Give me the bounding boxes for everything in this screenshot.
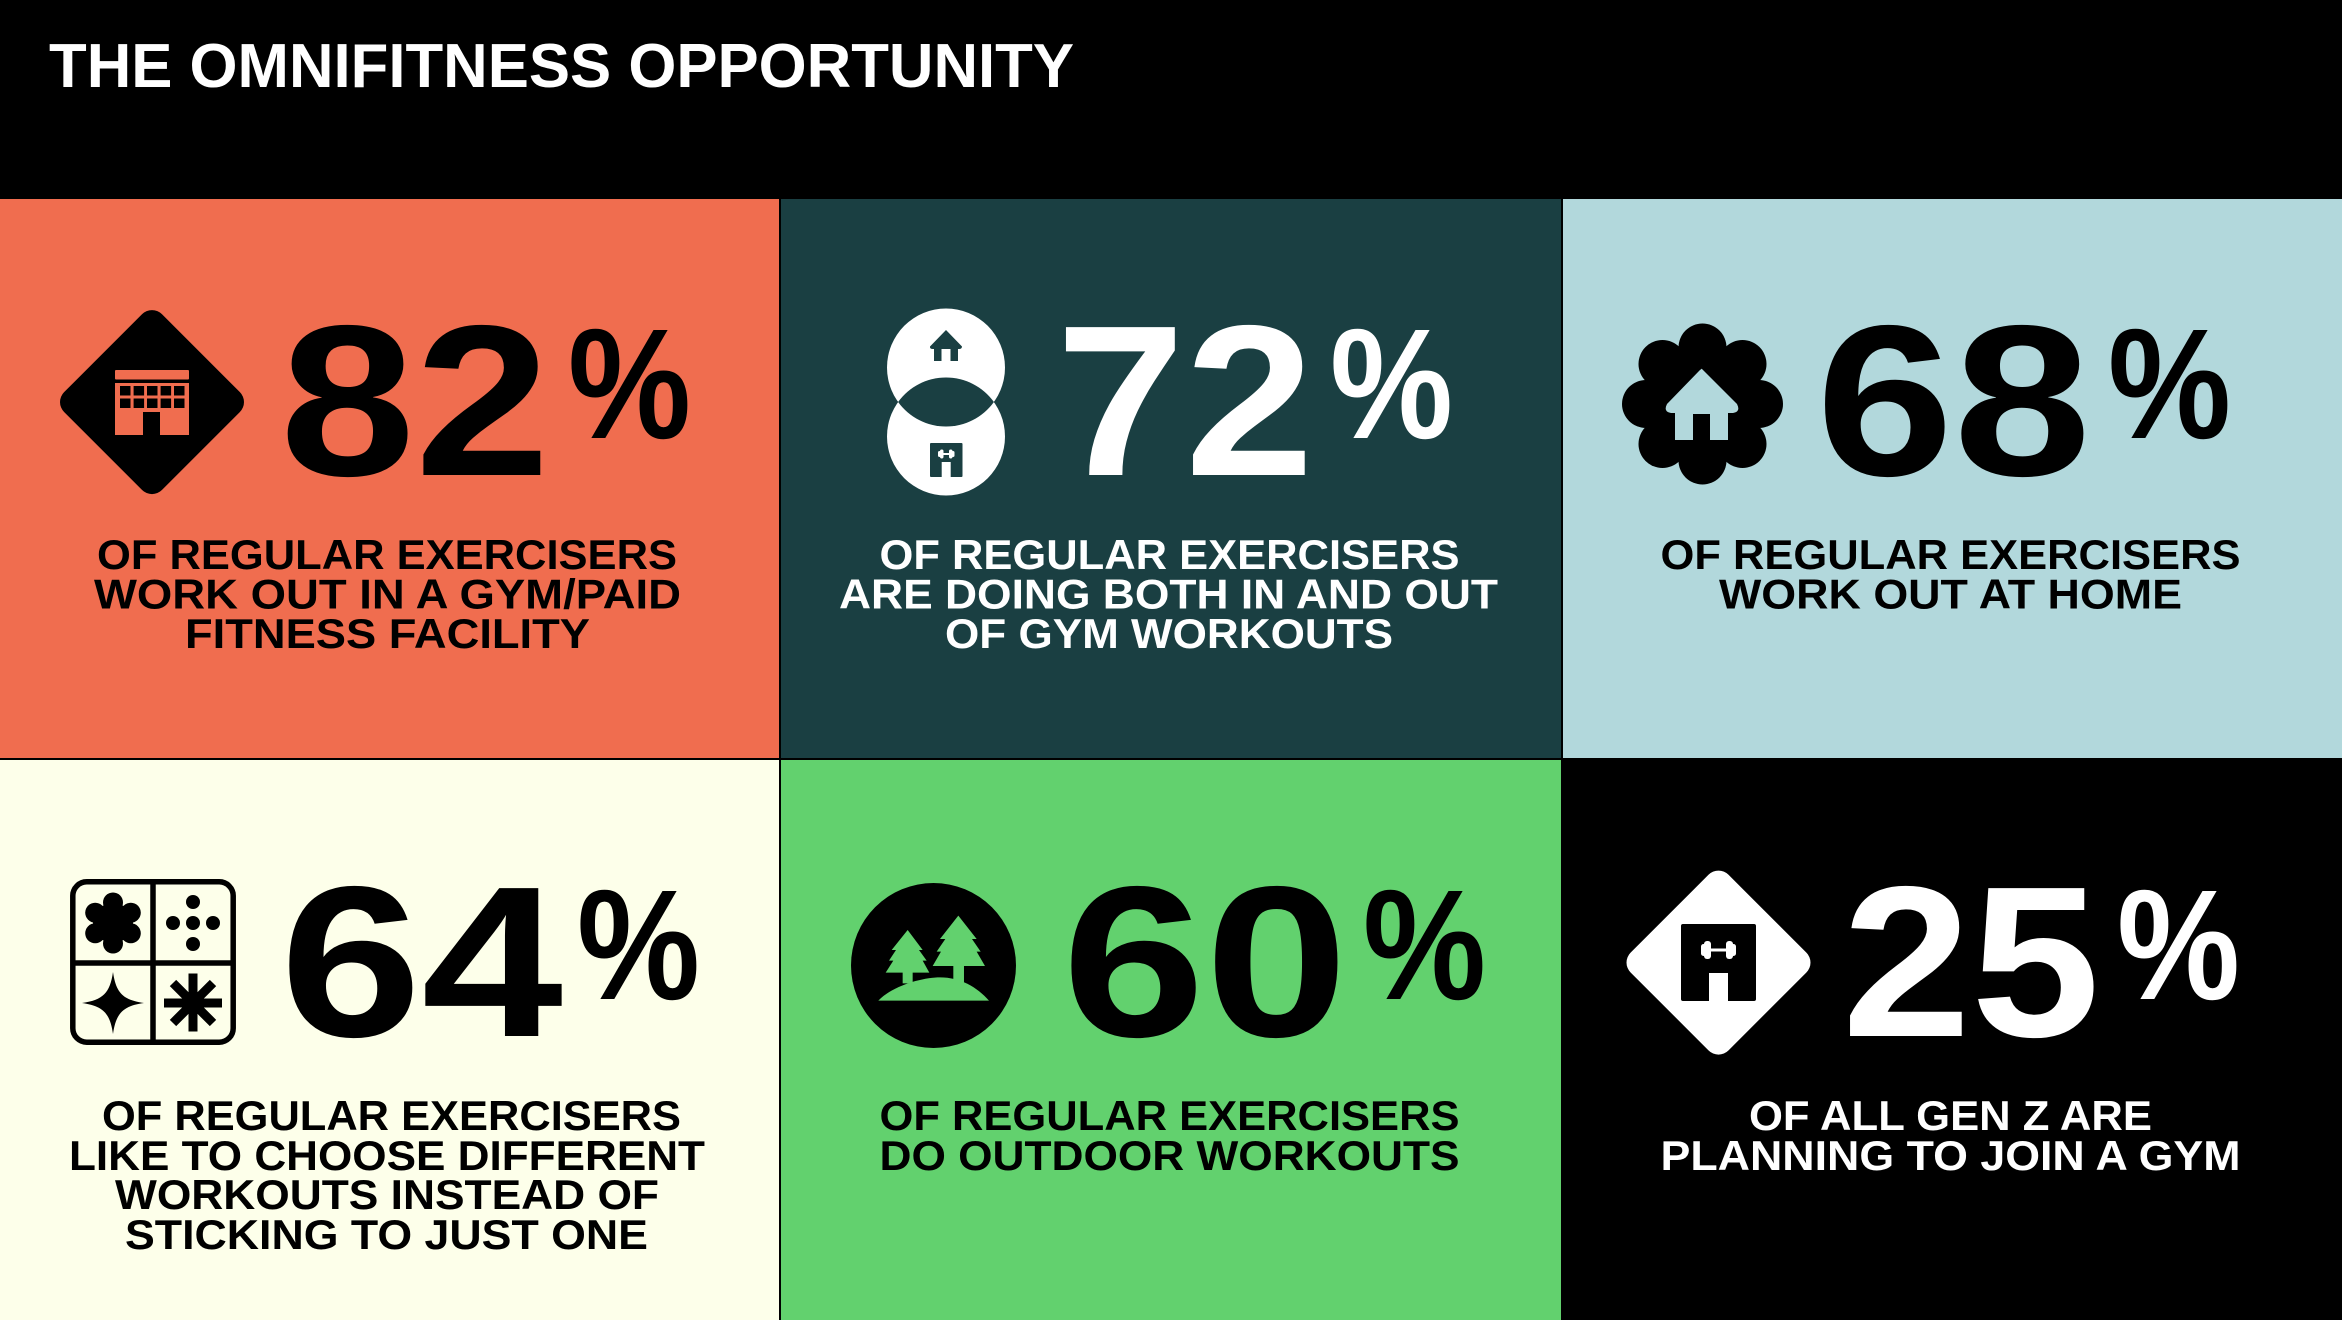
caption: STICKING TO JUST ONE <box>125 1211 648 1258</box>
panel: 72% both <box>781 199 1561 758</box>
caption: OF REGULAR EXERCISERS <box>102 1092 681 1139</box>
panel: 60% outdoor <box>781 760 1561 1320</box>
caption: LIKE TO CHOOSE DIFFERENT <box>69 1132 705 1179</box>
caption: OF REGULAR EXERCISERS <box>880 531 1460 578</box>
stat: 68: 68 <box>1816 280 2091 521</box>
icon: four-part grid of shapes <box>71 880 235 1044</box>
caption: PLANNING TO JOIN A GYM <box>1660 1132 2240 1179</box>
caption: OF ALL GEN Z ARE <box>1749 1092 2152 1139</box>
caption: WORKOUTS INSTEAD OF <box>115 1171 659 1218</box>
caption: WORK OUT AT HOME <box>1719 570 2182 618</box>
title: THE OMNIFITNESS OPPORTUNITY <box>49 32 1074 101</box>
panel: 82% gym <box>0 199 779 758</box>
caption: FITNESS FACILITY <box>185 610 590 657</box>
caption <box>839 531 1498 657</box>
panel: 64% variety <box>0 760 779 1320</box>
percent sign: % <box>2117 858 2240 1033</box>
percent sign: % <box>2108 297 2231 472</box>
stat: 25: 25 <box>1842 841 2100 1082</box>
stat: 72: 72 <box>1056 280 1314 521</box>
caption: OF GYM WORKOUTS <box>945 610 1393 657</box>
icon: trees in circle <box>851 883 1016 1048</box>
percent sign: % <box>568 297 691 472</box>
caption <box>94 531 681 657</box>
percent sign: % <box>1363 858 1486 1033</box>
icon: house in flower <box>1622 324 1783 484</box>
icon: gym in diamond <box>1621 865 1816 1060</box>
icon: venn of home and gym <box>887 308 1005 496</box>
caption <box>1660 1092 2240 1179</box>
stat: 60: 60 <box>1062 841 1348 1082</box>
caption <box>69 1092 705 1258</box>
panel: 25% gen z <box>1563 760 2342 1320</box>
caption: OF REGULAR EXERCISERS <box>97 531 677 578</box>
caption <box>1660 531 2240 618</box>
caption: ARE DOING BOTH IN AND OUT <box>839 570 1498 618</box>
caption: WORK OUT IN A GYM/PAID <box>94 570 681 618</box>
panel: 68% home <box>1563 199 2342 758</box>
percent sign: % <box>577 858 700 1033</box>
caption <box>880 1092 1460 1179</box>
icon: gym building in diamond <box>54 304 250 500</box>
stat: 64: 64 <box>280 841 563 1082</box>
caption: OF REGULAR EXERCISERS <box>880 1092 1460 1139</box>
percent sign: % <box>1330 297 1453 472</box>
caption: DO OUTDOOR WORKOUTS <box>880 1132 1460 1179</box>
stat: 82: 82 <box>280 280 550 521</box>
caption: OF REGULAR EXERCISERS <box>1660 531 2240 578</box>
